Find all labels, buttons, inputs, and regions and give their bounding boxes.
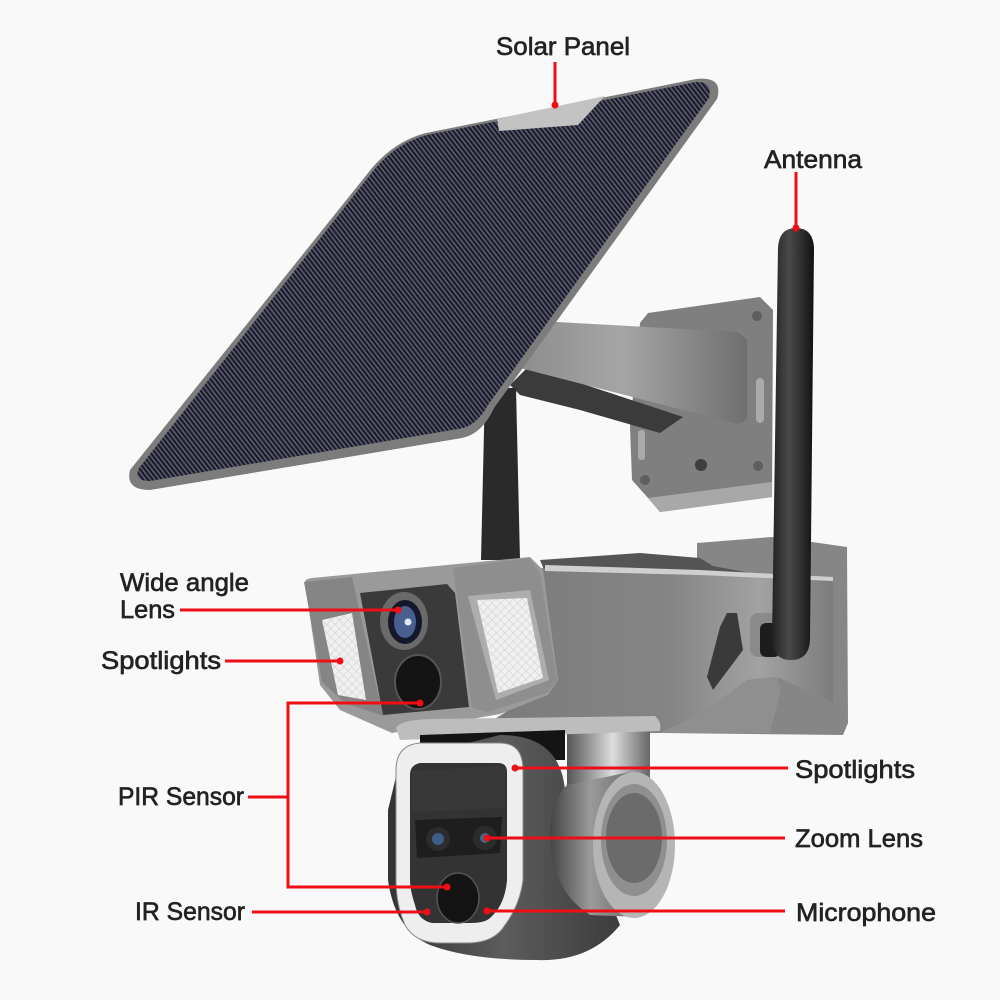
callout: IR Sensor — [135, 898, 430, 926]
callout: Wide angle Lens — [120, 569, 402, 624]
antenna connector — [750, 613, 778, 657]
left zoom lens — [426, 827, 450, 851]
camera neck and collar — [396, 716, 660, 788]
callout: PIR Sensor: PIR Sensor — [118, 783, 244, 811]
PTZ head — [388, 735, 675, 960]
callout: IR Sensor: IR Sensor — [135, 898, 245, 926]
callout: Spotlights left — [101, 647, 344, 675]
callout: Wide angle Lens: Lens — [120, 596, 175, 624]
right zoom lens — [473, 826, 497, 850]
antenna — [760, 228, 814, 660]
callout: Microphone — [484, 899, 936, 927]
side cylinder — [550, 772, 640, 917]
right spotlight — [468, 590, 549, 700]
callout: Solar Panel — [496, 33, 630, 108]
white ring spotlight — [396, 743, 523, 943]
panel tab — [497, 96, 605, 131]
callout: Spotlights right: Spotlights — [795, 756, 915, 784]
callout: Zoom Lens — [484, 825, 923, 853]
callout: Wide angle Lens: Wide angle — [120, 569, 249, 597]
callout: Microphone: Microphone — [796, 899, 936, 927]
callout: PIR Sensor — [118, 700, 450, 890]
callout: Spotlights right — [512, 756, 915, 784]
side lens ring — [593, 772, 675, 918]
callout: Spotlights left: Spotlights — [101, 647, 221, 675]
callout: Solar Panel: Solar Panel — [496, 33, 630, 61]
wall mount plate — [630, 297, 773, 512]
callout: Zoom Lens: Zoom Lens — [795, 825, 923, 853]
solar panel — [129, 79, 718, 490]
latch — [707, 613, 743, 690]
callout: Antenna: Antenna — [764, 146, 862, 174]
PIR window — [395, 655, 441, 709]
top window — [412, 766, 505, 812]
left spotlight — [322, 613, 366, 700]
large sensor — [437, 873, 479, 923]
lens bar — [415, 817, 502, 858]
callout: Antenna — [764, 146, 862, 232]
wide angle lens — [380, 592, 428, 650]
solar panel pole — [481, 388, 520, 560]
inner face — [410, 763, 507, 923]
support arm — [510, 320, 747, 433]
camera rear plate — [660, 537, 848, 735]
camera upper housing — [304, 553, 833, 735]
